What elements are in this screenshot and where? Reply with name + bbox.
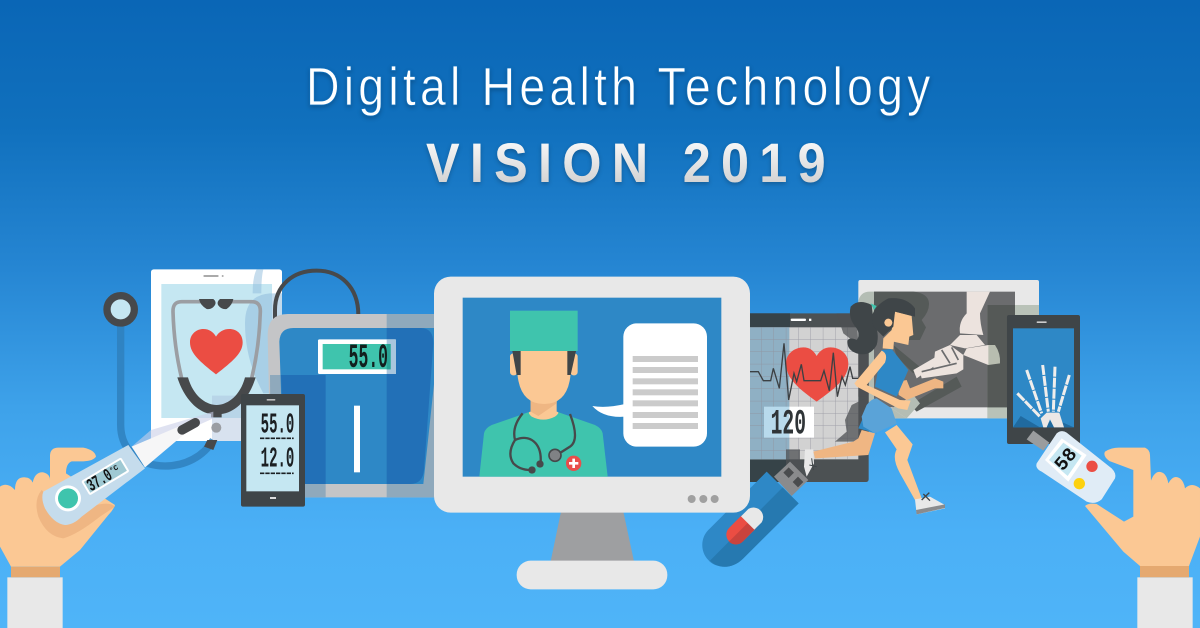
- USB drive with pill: [702, 462, 808, 567]
- left hand and sleeve: [0, 448, 115, 628]
- right hand and sleeve: [1085, 448, 1200, 628]
- hair: [872, 298, 915, 337]
- title: VISION 2019: [426, 133, 826, 195]
- ECG tablet and X-ray group: [702, 280, 1200, 628]
- left device group: [0, 269, 440, 628]
- display: [318, 339, 396, 374]
- top: [875, 349, 908, 397]
- phone with hand x-ray: [1007, 315, 1080, 444]
- blood pressure monitor: [268, 271, 440, 497]
- running woman: [804, 298, 945, 514]
- heart: [190, 329, 243, 374]
- runner shadow on tablet: [786, 313, 869, 482]
- glucose meter: 58: [1050, 444, 1082, 476]
- ponytail: [847, 302, 878, 354]
- thermometer: [42, 412, 213, 525]
- readout: [764, 407, 789, 438]
- title: Digital Health Technology: [306, 56, 931, 117]
- metatarsals: [920, 345, 963, 378]
- heart: [786, 347, 848, 402]
- monitor screen: [463, 298, 721, 477]
- back leg: [813, 430, 875, 458]
- monitor stand: [551, 512, 634, 561]
- neck: [883, 338, 894, 349]
- blood pressure monitor: 55.0: [349, 339, 388, 378]
- front shoe: [915, 497, 945, 514]
- foot bones: [960, 292, 990, 335]
- phone with readings: 55.0: [261, 408, 294, 441]
- phone with readings: 12.0: [261, 443, 294, 476]
- speech bubble: [592, 323, 707, 447]
- x-ray panel: [858, 280, 1039, 418]
- ECG tablet: 120: [771, 404, 806, 444]
- monitor frame: [434, 277, 750, 513]
- tablet with heart: [151, 269, 282, 441]
- shorts: [858, 413, 877, 433]
- thermometer: °C: [108, 463, 121, 476]
- thermometer: 37.0: [84, 466, 116, 497]
- stethoscope: [107, 296, 260, 466]
- phone with readings: [241, 394, 305, 507]
- glucose meter: [1027, 431, 1115, 503]
- front leg: [885, 425, 922, 500]
- ECG trace: [750, 343, 860, 400]
- title: [306, 56, 931, 195]
- monitor base: [517, 561, 667, 589]
- ECG tablet: [733, 313, 869, 482]
- face: [883, 312, 913, 345]
- doctor: [479, 311, 608, 477]
- back arm: [898, 378, 943, 400]
- runner shadow: [874, 292, 929, 340]
- central monitor: [434, 277, 750, 589]
- hand bones: [1017, 365, 1069, 417]
- front arm: [854, 351, 911, 410]
- monitor buttons: [688, 495, 719, 503]
- back shoe: [804, 449, 814, 477]
